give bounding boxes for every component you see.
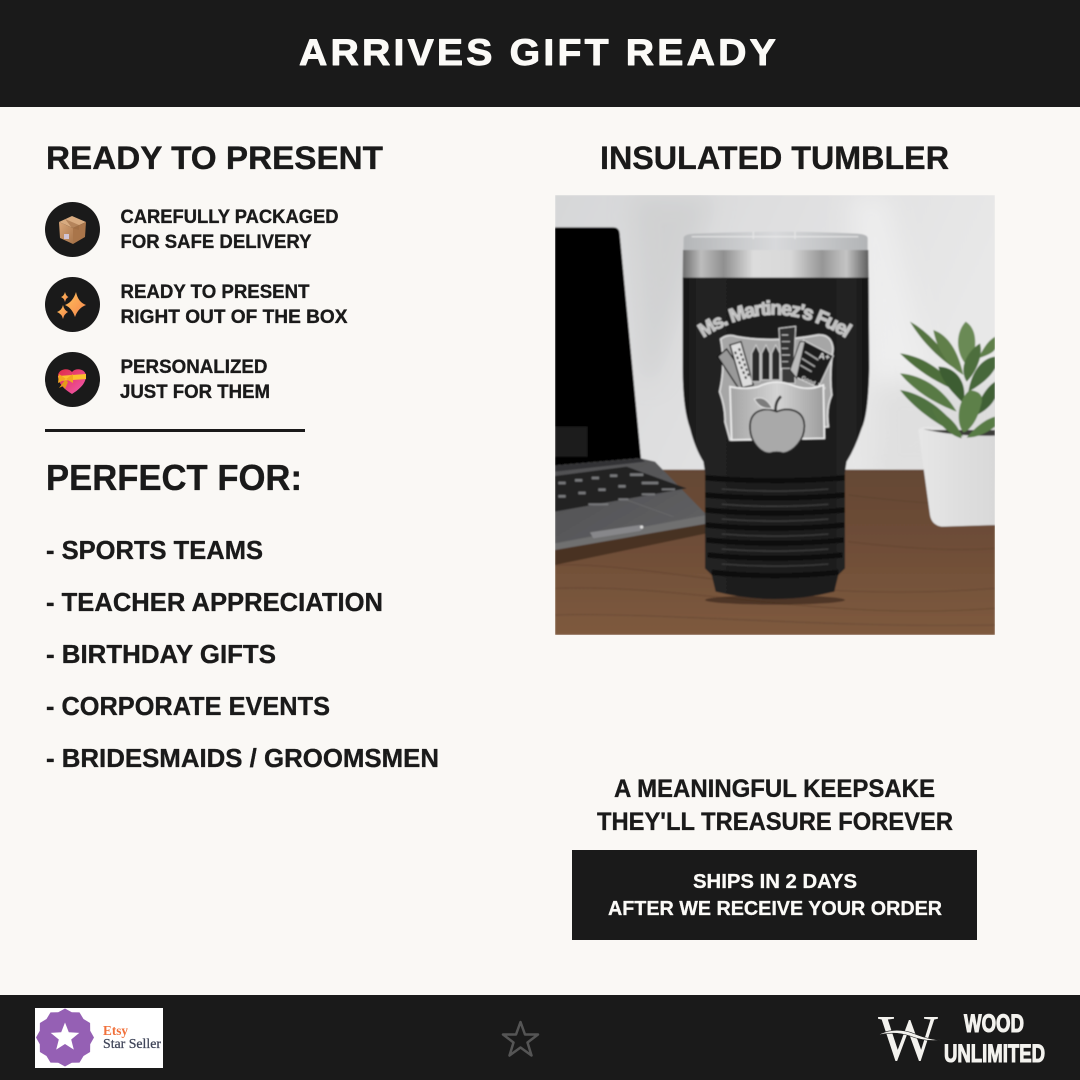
- list: occasions: - BIRTHDAY GIFTS: [46, 639, 276, 669]
- logo: wood unlimited: WOOD: [964, 1010, 1024, 1038]
- title: ARRIVES GIFT READY: [299, 32, 779, 73]
- header bar: [0, 0, 1080, 107]
- footer bar: [0, 995, 1080, 1080]
- feature: ready to present: [45, 277, 348, 332]
- badge: etsy star seller: [35, 1008, 163, 1068]
- feature: personalized: PERSONALIZED: [120, 357, 268, 378]
- steel rim: [683, 250, 869, 279]
- panel: ready to present: [45, 140, 383, 407]
- product photo: engraved tumbler on desk: [555, 195, 995, 635]
- icon: sparkles: [57, 292, 86, 319]
- pencils and crayons: [718, 326, 833, 392]
- keepsake message: A MEANINGFUL KEEPSAKE: [614, 775, 935, 803]
- list: occasions: - SPORTS TEAMS: [46, 535, 263, 565]
- panel: perfect for: [46, 457, 439, 773]
- pencils and crayons: A+: [818, 350, 831, 362]
- list: occasions: - TEACHER APPRECIATION: [46, 587, 383, 617]
- engraved text: Ms. Martinez's Fuel: [696, 298, 854, 339]
- icon: cardboard box: [59, 216, 86, 244]
- laptop: [555, 227, 708, 550]
- list: occasions: [46, 535, 439, 773]
- feature: carefully packaged: CAREFULLY PACKAGED: [120, 207, 338, 228]
- engraved apple: [750, 396, 804, 453]
- shipping callout: AFTER WE RECEIVE YOUR ORDER: [608, 898, 943, 920]
- feature: ready to present: READY TO PRESENT: [120, 282, 310, 303]
- heading: ready to present: READY TO PRESENT: [46, 140, 383, 176]
- logo: wood unlimited: [878, 1002, 1045, 1075]
- potted plant: [900, 322, 995, 527]
- tumbler: [682, 232, 908, 605]
- icon: outline star: [503, 1022, 538, 1056]
- ribs: [704, 478, 846, 576]
- engraving: [696, 298, 854, 454]
- keepsake message: [597, 775, 953, 836]
- feature: personalized: JUST FOR THEM: [120, 382, 270, 403]
- logo: wood unlimited: UNLIMITED: [944, 1040, 1045, 1068]
- heading: insulated tumbler: INSULATED TUMBLER: [600, 140, 949, 176]
- heading: perfect for: PERFECT FOR:: [46, 457, 302, 498]
- icon: purple seal: [36, 1008, 94, 1066]
- list: occasions: - BRIDESMAIDS / GROOMSMEN: [46, 743, 439, 773]
- desk: [555, 470, 995, 635]
- pencils and crayons: Good Job: [800, 375, 827, 392]
- shipping callout: [572, 850, 977, 940]
- shipping callout: SHIPS IN 2 DAYS: [693, 871, 857, 893]
- leaves: [900, 322, 995, 438]
- keepsake message: THEY'LL TREASURE FOREVER: [597, 808, 953, 836]
- lid: [683, 232, 868, 252]
- engraved shield: [720, 335, 833, 440]
- feature: ready to present: RIGHT OUT OF THE BOX: [120, 307, 348, 328]
- feature: carefully packaged: FOR SAFE DELIVERY: [120, 232, 312, 253]
- body: [683, 278, 869, 599]
- feature: personalized: [45, 352, 270, 407]
- list: occasions: - CORPORATE EVENTS: [46, 691, 330, 721]
- badge: etsy star seller: Etsy: [103, 1024, 128, 1039]
- badge: etsy star seller: Star Seller: [103, 1036, 162, 1051]
- icon: gift heart: [58, 369, 86, 394]
- wall: [555, 195, 1012, 482]
- feature: carefully packaged: [45, 202, 338, 257]
- engraved pocket: [730, 382, 824, 440]
- logo: wood unlimited: W: [878, 1002, 939, 1075]
